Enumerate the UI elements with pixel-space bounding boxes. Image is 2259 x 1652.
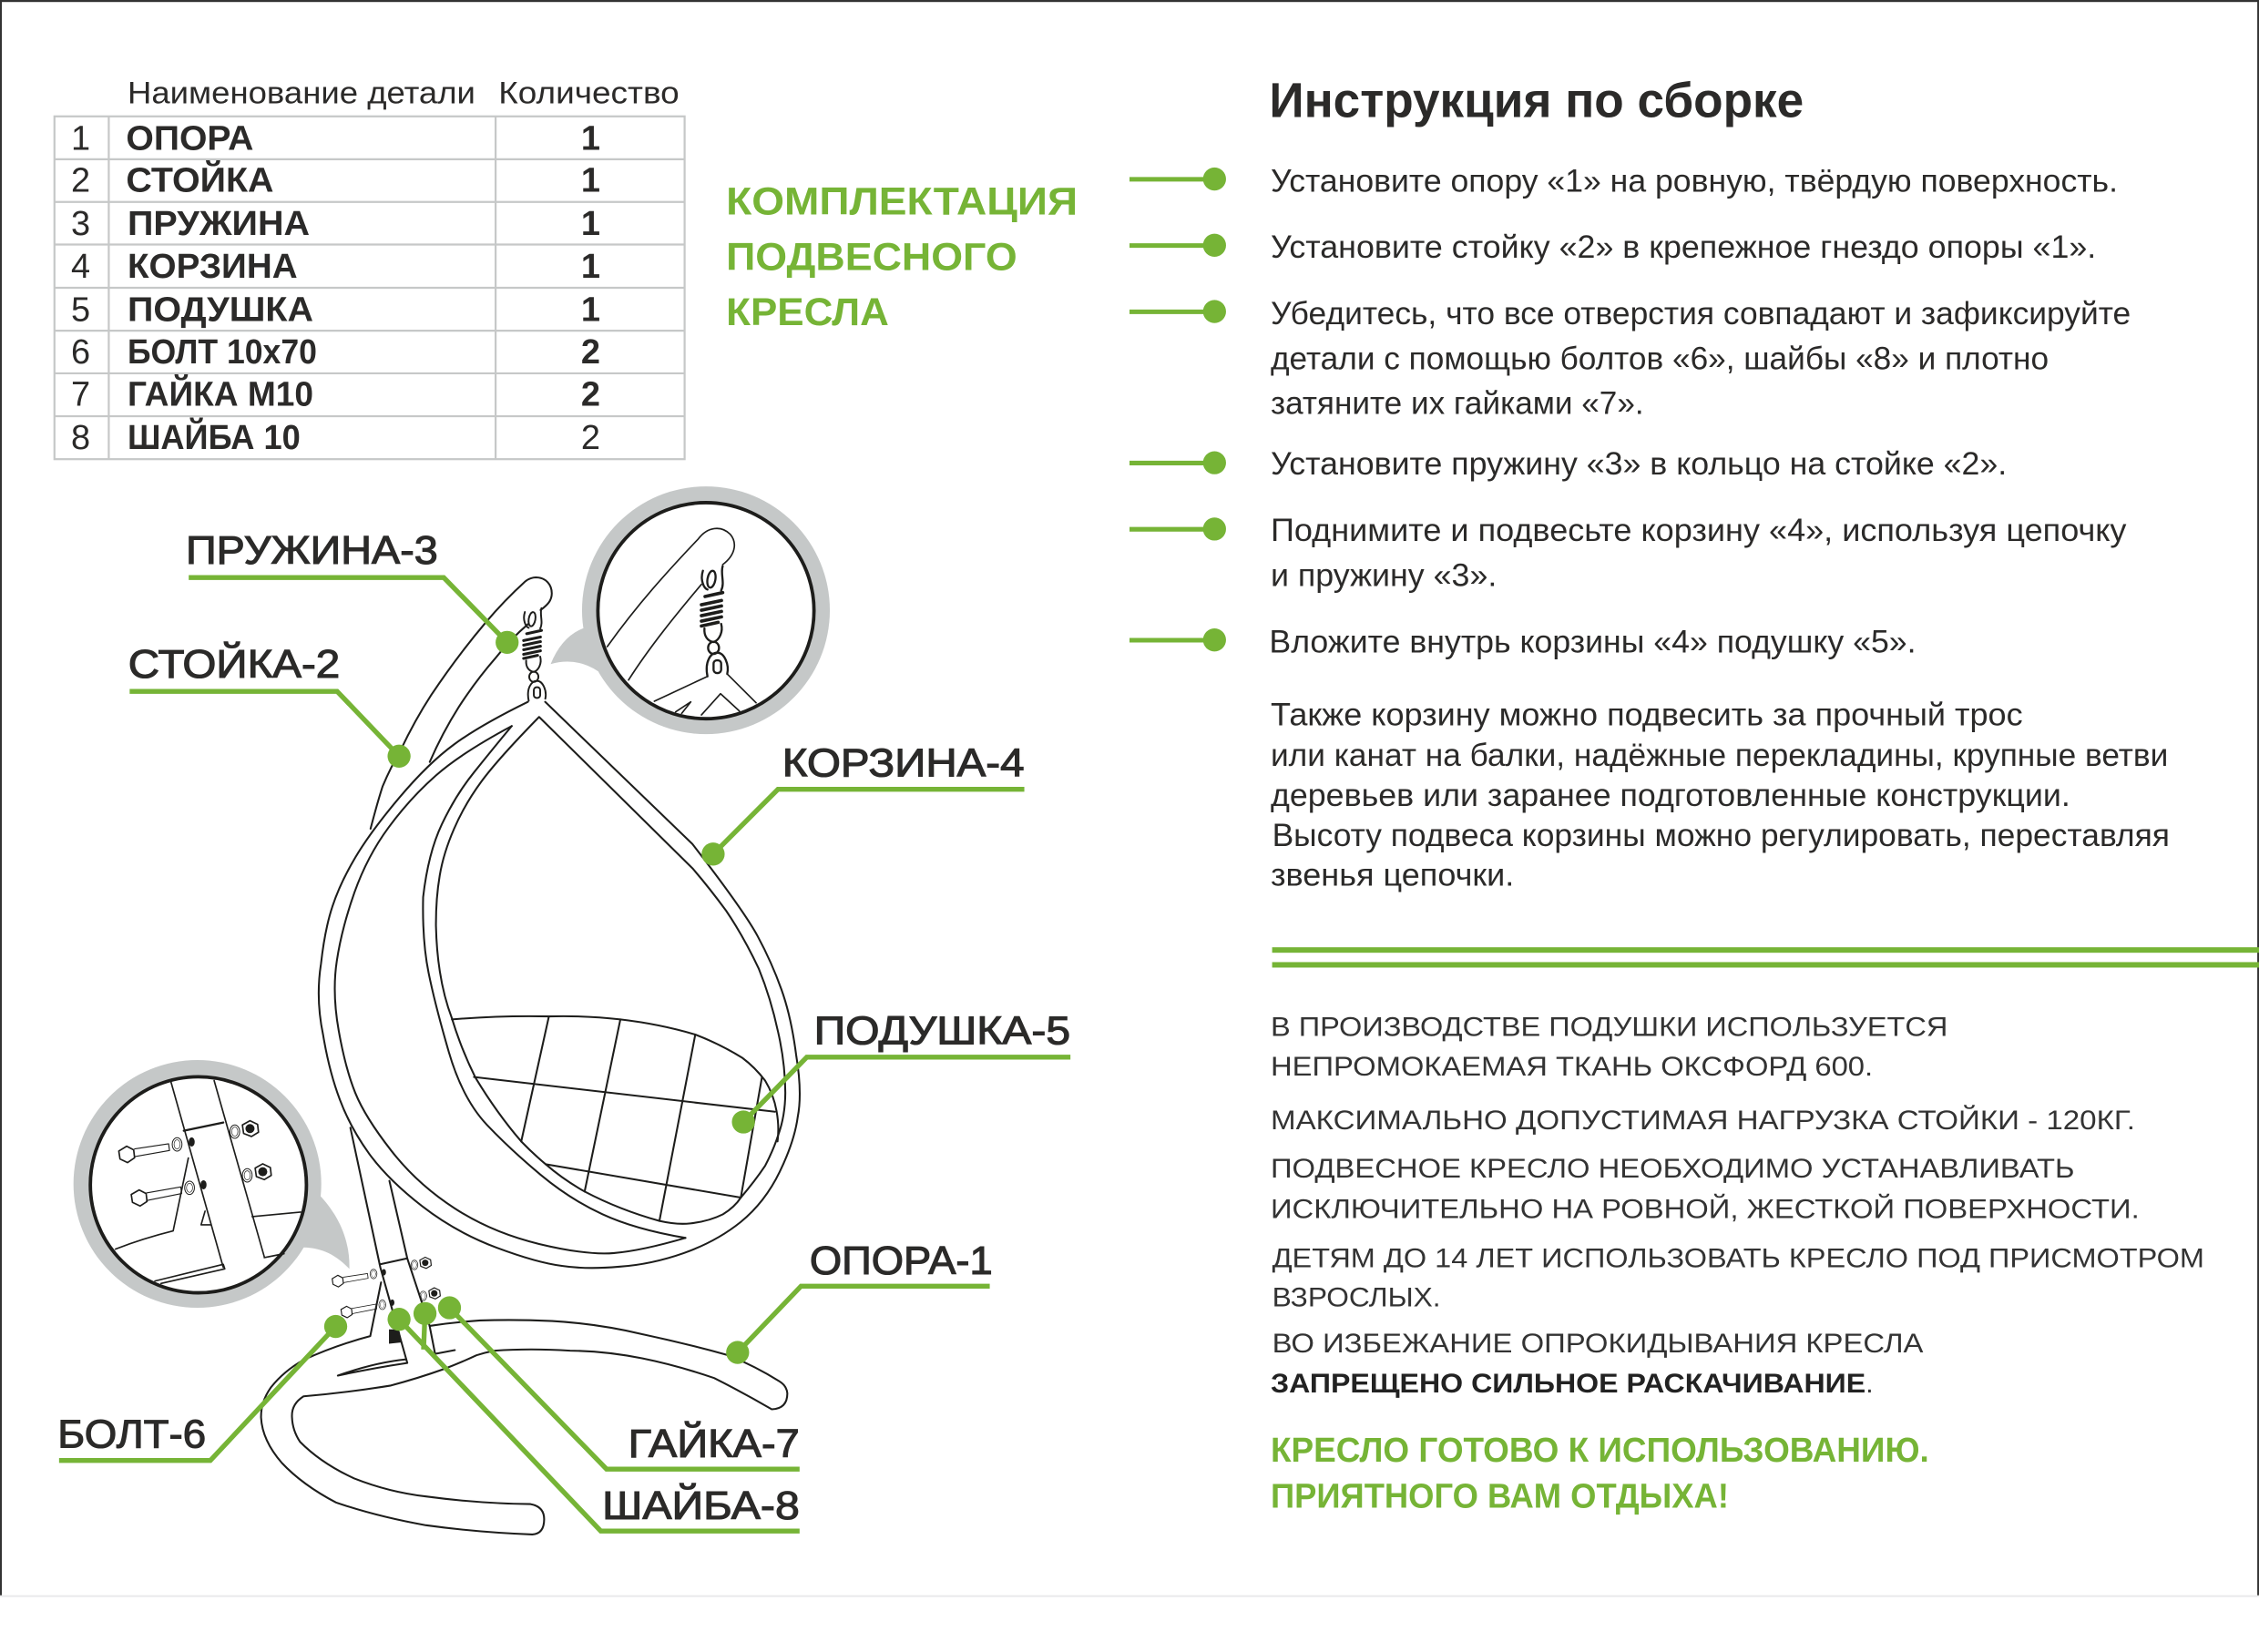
zoom callout: bolts [74,1060,350,1308]
table grid [55,117,685,459]
instruction steps: и пружину «3». [1271,559,1497,594]
safety notes: НЕПРОМОКАЕМАЯ ТКАНЬ ОКСФОРД 600. [1271,1052,1873,1082]
quantities: 2 [581,333,600,372]
part names: ШАЙБА 10 [128,416,301,457]
heading: set contents: КОМПЛЕКТАЦИЯ [726,180,1078,224]
row numbers: 7 [71,376,90,414]
label: base: ОПОРА-1 [810,1239,993,1283]
safety notes: ДЕТЯМ ДО 14 ЛЕТ ИСПОЛЬЗОВАТЬ КРЕСЛО ПОД ПРИСМОТРОМ [1273,1244,2204,1274]
instruction steps: детали с помощью болтов «6», шайбы «8» и плотно [1271,342,2049,377]
instruction steps: Убедитесь, что все отверстия совпадают и зафиксируйте [1271,297,2131,331]
instruction steps: Установите стойку «2» в крепежное гнездо опоры «1». [1271,230,2096,265]
label: bolt: БОЛТ-6 [57,1412,206,1456]
label: base [726,1239,993,1364]
safety notes: ПОДВЕСНОЕ КРЕСЛО НЕОБХОДИМО УСТАНАВЛИВАТЬ [1271,1154,2075,1184]
base socket marks [338,1351,455,1376]
label: washer [387,1302,800,1531]
safety notes: ВО ИЗБЕЖАНИЕ ОПРОКИДЫВАНИЯ КРЕСЛА [1273,1329,1923,1359]
row numbers: 5 [71,291,90,330]
safety notes [1271,1012,2204,1399]
quantities: 2 [581,419,600,457]
part names: ПОДУШКА [128,291,313,330]
label: bolt [57,1315,347,1461]
base [261,1282,787,1535]
label: basket: КОРЗИНА-4 [782,741,1025,785]
row numbers: 8 [71,419,90,457]
safety notes: МАКСИМАЛЬНО ДОПУСТИМАЯ НАГРУЗКА СТОЙКИ - 120КГ. [1271,1105,2135,1136]
label: cushion: ПОДУШКА-5 [814,1010,1070,1054]
stand upper [371,577,552,829]
label: spring [186,529,518,654]
part names: КОРЗИНА [128,248,298,286]
instruction steps: Установите опору «1» на ровную, твёрдую поверхность. [1271,164,2118,199]
label: nut: ГАЙКА-7 [629,1420,800,1466]
stand lower [351,1127,435,1360]
bullet markers [1130,168,1226,651]
quantities: 1 [581,248,600,286]
closing message: КРЕСЛО ГОТОВО К ИСПОЛЬЗОВАНИЮ. [1271,1432,1929,1470]
quantities: 1 [581,162,600,200]
part names: ПРУЖИНА [128,205,310,243]
paragraph: alternative hanging: звенья цепочки. [1271,858,1514,892]
label: cushion [731,1010,1070,1134]
label: stand [128,640,411,768]
green double divider [1273,947,2259,967]
paragraph: alternative hanging: Высоту подвеса корзины можно регулировать, переставляя [1273,819,2170,853]
row numbers: 3 [71,205,90,243]
quantities: 1 [581,119,600,158]
heading: set contents: ПОДВЕСНОГО [726,235,1017,279]
instruction steps: Поднимите и подвесьте корзину «4», используя цепочку [1271,514,2127,548]
table header: Наименование детали [128,76,475,111]
chair diagram [74,486,830,1535]
safety notes: ЗАПРЕЩЕНО СИЛЬНОЕ РАСКАЧИВАНИЕ [1271,1369,1865,1399]
safety notes: В ПРОИЗВОДСТВЕ ПОДУШКИ ИСПОЛЬЗУЕТСЯ [1271,1012,1947,1042]
row numbers [71,119,90,457]
label: stand: СТОЙКА-2 [128,640,340,687]
safety notes: ВЗРОСЛЫХ. [1273,1282,1441,1312]
paragraph: alternative hanging: или канат на балки, надёжные перекладины, крупные ветви [1271,739,2168,773]
row numbers: 1 [71,119,90,158]
safety notes: ИСКЛЮЧИТЕЛЬНО НА РОВНОЙ, ЖЕСТКОЙ ПОВЕРХНОСТИ. [1271,1193,2140,1224]
part names: СТОЙКА [126,159,274,200]
instruction steps: затяните их гайками «7». [1271,387,1644,422]
part names: ГАЙКА М10 [128,373,313,414]
quantities: 2 [581,376,600,414]
paragraph: alternative hanging: Также корзину можно подвесить за прочный трос [1271,699,2023,733]
closing message [1271,1432,1929,1515]
paragraph: alternative hanging [1271,699,2170,892]
part names: БОЛТ 10х70 [128,333,317,372]
heading: set contents [726,180,1078,334]
instruction steps: Вложите внутрь корзины «4» подушку «5». [1269,625,1917,659]
small bolts, washers, nuts [332,1257,440,1318]
label: nut [438,1296,800,1469]
part names: ОПОРА [126,119,253,158]
quantities: 1 [581,291,600,330]
closing message: ПРИЯТНОГО ВАМ ОТДЫХА! [1271,1477,1729,1515]
row numbers: 6 [71,333,90,372]
basket [319,702,800,1268]
zoom callout: spring [550,486,830,734]
row numbers: 4 [71,248,90,286]
part names [126,119,317,457]
instruction steps: Установите пружину «3» в кольцо на стойке «2». [1271,447,2007,482]
cushion [452,1016,778,1221]
label: spring: ПРУЖИНА-3 [186,529,438,573]
safety notes: . [1865,1369,1874,1399]
label: basket [701,741,1025,865]
parts table [55,76,685,459]
quantities: 1 [581,205,600,243]
table header [128,76,680,111]
quantities [581,119,600,457]
instruction steps [1269,164,2131,659]
table header: Количество [498,76,680,111]
title: assembly instructions: Инструкция по сборке [1269,74,1804,128]
paragraph: alternative hanging: деревьев или заранее подготовленные конструкции. [1271,779,2070,813]
spring and chain [524,608,546,700]
row numbers: 2 [71,162,90,200]
heading: set contents: КРЕСЛА [726,291,889,334]
label: washer: ШАЙБА-8 [602,1482,800,1528]
